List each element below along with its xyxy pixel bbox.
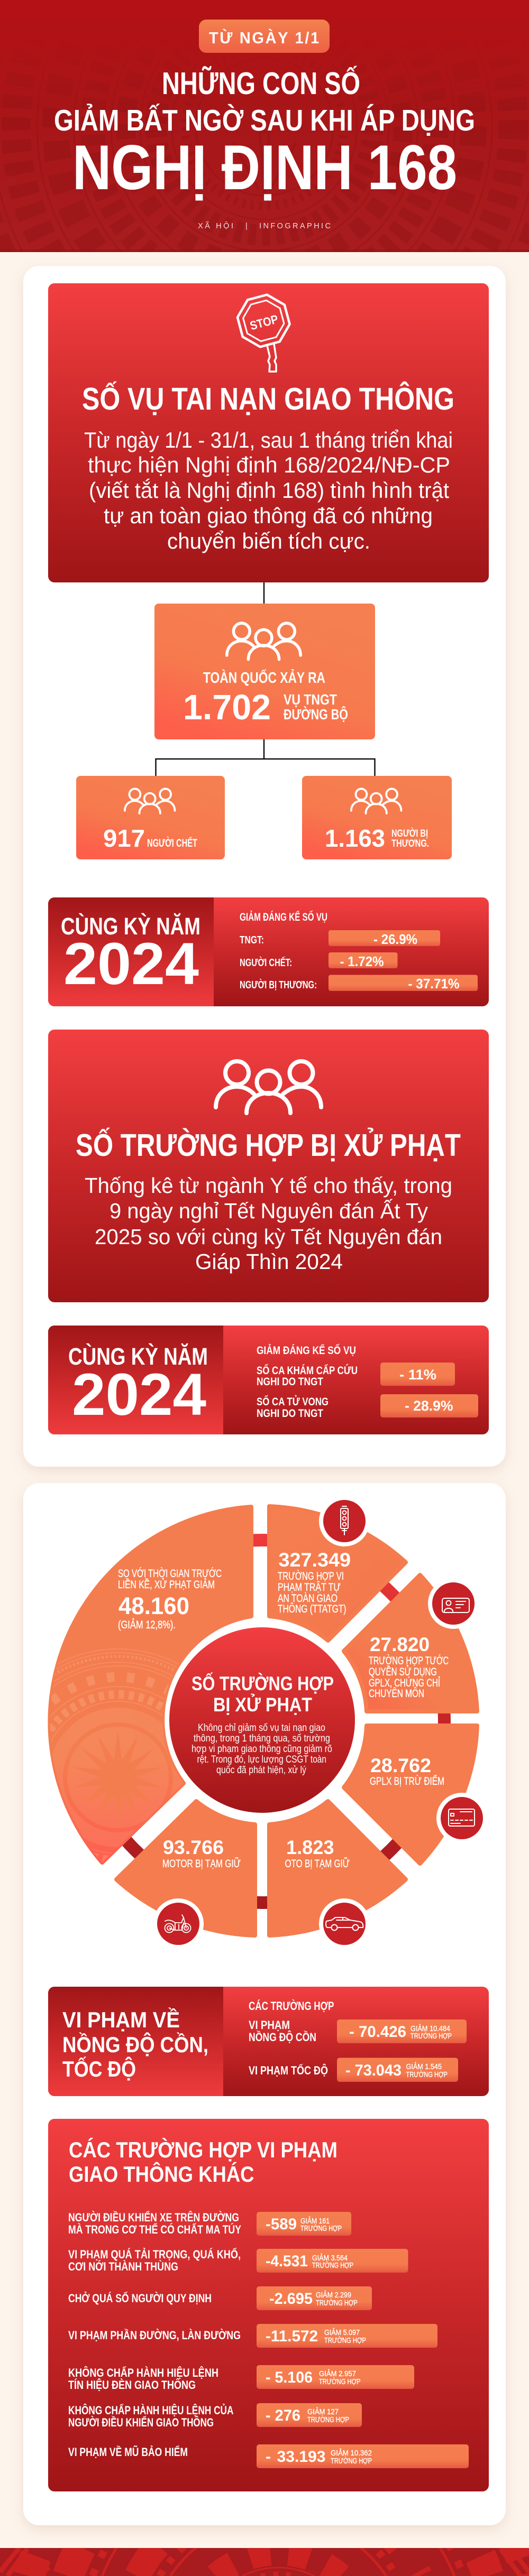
heading: SỐ VỤ TAI NẠN GIAO THÔNG — [82, 381, 454, 416]
total unit: VỤ TNGT — [284, 691, 337, 708]
row: traffic controller: KHÔNG CHẤP HÀNH HIỆU LỆNH CỦA — [68, 2404, 234, 2417]
icon: stop sign: STOP — [249, 312, 279, 332]
row: helmets: TRƯỜNG HỢP — [331, 2457, 372, 2466]
bar: deaths — [240, 952, 398, 969]
intro text — [85, 1173, 452, 1274]
segment: compared to previous period: (GIẢM 12,8%). — [118, 1619, 176, 1631]
row: drugs: MÀ TRONG CƠ THỂ CÓ CHẤT MA TÚY — [68, 2223, 241, 2236]
row: lane violations: VI PHẠM PHẦN ĐƯỜNG, LÀN ĐƯỜNG — [68, 2329, 241, 2342]
segment: licences revoked: QUYỀN SỬ DỤNG — [369, 1665, 437, 1678]
deaths number: 917 — [103, 824, 145, 852]
segment: licence points deducted: GPLX BỊ TRỪ ĐIỂM — [370, 1775, 444, 1787]
intro text: Từ ngày 1/1 - 31/1, sau 1 tháng triển khai — [84, 428, 453, 452]
segment: compared to previous period: LIỀN KỀ, XỬ PHẠT GIẢM — [118, 1578, 215, 1591]
row: traffic controller: - 276 — [266, 2407, 300, 2424]
bars label: GIẢM ĐÁNG KỂ SỐ VỤ — [240, 911, 327, 923]
box: nationwide total — [154, 604, 375, 739]
row: helmets — [68, 2444, 469, 2468]
row: helmets: GIẢM 10.362 — [331, 2449, 372, 2458]
panel heading: VI PHẠM VỀ — [62, 2007, 180, 2032]
icon: people — [227, 623, 300, 660]
bar: injured: - 37.71% — [408, 976, 459, 992]
date badge — [199, 20, 330, 53]
segment: cars impounded: OTO BỊ TẠM GIỮ — [285, 1857, 350, 1870]
section tag — [198, 221, 331, 230]
panel heading: NỒNG ĐỘ CỒN, — [62, 2032, 208, 2057]
icon: people — [216, 1061, 321, 1113]
bar: alcohol: NỒNG ĐỘ CỒN — [249, 2031, 316, 2044]
box: injured — [302, 776, 452, 859]
row: lane violations: -11.572 — [266, 2328, 318, 2345]
segment: licence points deducted — [344, 1726, 477, 1864]
row: traffic signals: TÍN HIỆU ĐÈN GIAO THÔNG — [68, 2378, 196, 2392]
bar: injured — [240, 975, 478, 992]
segment: compared to previous period: SO VỚI THỜI GIAN TRƯỚC — [118, 1568, 222, 1580]
icon: traffic light — [321, 1498, 368, 1544]
bar: alcohol: GIẢM 10.484 — [411, 2024, 450, 2033]
bar: TNGT: TNGT: — [240, 934, 264, 946]
row: overload: GIẢM 3.564 — [312, 2254, 348, 2263]
segment: traffic order violations: 327.349 — [278, 1549, 351, 1571]
bar: alcohol: TRƯỜNG HỢP — [411, 2032, 452, 2041]
main title — [54, 66, 475, 203]
panel heading: GIAO THÔNG KHÁC — [69, 2161, 254, 2186]
segment: motorbikes impounded: MOTOR BỊ TẠM GIỮ — [162, 1857, 241, 1870]
injured number: 1.163 — [325, 824, 385, 852]
bar: fatalities: - 28.9% — [405, 1398, 453, 1414]
segment: licences revoked: GPLX, CHỨNG CHỈ — [369, 1677, 440, 1689]
row: traffic controller: NGƯỜI ĐIỀU KHIỂN GIAO THÔNG — [68, 2416, 214, 2429]
bar: TNGT — [240, 930, 440, 947]
bars label: CÁC TRƯỜNG HỢP — [249, 1999, 334, 2013]
row: drugs: TRƯỜNG HỢP — [300, 2224, 342, 2233]
intro text: chuyển biến tích cực. — [167, 529, 370, 553]
bar: injured: NGƯỜI BỊ THƯƠNG: — [240, 978, 317, 991]
intro text: Giáp Thìn 2024 — [195, 1249, 343, 1274]
segment: motorbikes impounded — [116, 1801, 255, 1935]
bar: alcohol — [249, 2018, 467, 2044]
intro text: (viết tắt là Nghị định 168) tình hình trật — [89, 478, 449, 503]
row: lane violations: TRƯỜNG HỢP — [324, 2336, 366, 2345]
bar: speed: TRƯỜNG HỢP — [406, 2070, 448, 2079]
panel: accident intro — [48, 283, 489, 582]
centre circle: hợp vi phạm giao thông cũng giảm rõ — [191, 1743, 332, 1755]
icon: licence card — [430, 1580, 477, 1627]
icon: bank card — [439, 1795, 485, 1841]
row: helmets: VI PHẠM VỀ MŨ BẢO HIỂM — [68, 2445, 188, 2459]
date badge: TỪ NGÀY 1/1 — [209, 28, 321, 47]
total label: TOÀN QUỐC XẢY RA — [203, 669, 325, 687]
row: traffic signals: - 5.106 — [266, 2369, 313, 2386]
header banner — [0, 0, 529, 252]
segment: licences revoked — [344, 1575, 477, 1711]
year heading: 2024 — [72, 1361, 206, 1428]
row: too many passengers — [68, 2286, 372, 2310]
row: drugs: NGƯỜI ĐIỀU KHIỂN XE TRÊN ĐƯỜNG — [68, 2211, 239, 2224]
icon: car — [321, 1901, 368, 1947]
row: overload: VI PHẠM QUÁ TẢI TRỌNG, QUÁ KHỔ, — [68, 2248, 241, 2261]
row: traffic controller — [68, 2403, 362, 2429]
row: traffic signals — [68, 2365, 414, 2392]
panel: other violations — [48, 2119, 489, 2491]
row: too many passengers: CHỞ QUÁ SỐ NGƯỜI QUY ĐỊNH — [68, 2291, 212, 2305]
section tag: INFOGRAPHIC — [259, 222, 331, 230]
bar: emergency cases — [257, 1363, 455, 1388]
panel: comparison 2024 accidents — [48, 897, 489, 1006]
icon: motorbike — [155, 1901, 202, 1947]
bars label: GIẢM ĐÁNG KỂ SỐ VỤ — [257, 1344, 356, 1357]
row: helmets: - — [266, 2448, 271, 2466]
segment: traffic order violations: AN TOÀN GIAO — [278, 1592, 338, 1605]
panel heading: CÁC TRƯỜNG HỢP VI PHẠM — [69, 2137, 338, 2162]
row: drugs: -589 — [266, 2216, 297, 2233]
centre circle: thông, trong 1 tháng qua, số trường — [194, 1732, 330, 1744]
row: lane violations: GIẢM 5.097 — [324, 2328, 360, 2337]
intro text — [84, 428, 453, 553]
segment: motorbikes impounded: 93.766 — [163, 1837, 224, 1858]
row: overload: CƠI NỚI THÀNH THÙNG — [68, 2260, 178, 2273]
section tag: XÃ HỘI — [198, 221, 233, 230]
bar: emergency cases: SỐ CA KHÁM CẤP CỨU — [257, 1364, 358, 1377]
bar: speed: - 73.043 — [345, 2062, 402, 2079]
total unit: ĐƯỜNG BỘ — [284, 706, 348, 722]
bar: deaths: NGƯỜI CHẾT: — [240, 956, 292, 969]
row: lane violations — [68, 2324, 437, 2348]
white card: penalties — [0, 1483, 506, 2525]
segment: cars impounded: 1.823 — [286, 1837, 334, 1858]
bar: fatalities — [257, 1394, 478, 1420]
intro text: Thống kê từ ngành Y tế cho thấy, trong — [85, 1173, 452, 1198]
radial chart: penalty cases — [48, 1500, 483, 1945]
injured unit: THƯƠNG. — [391, 838, 429, 849]
panel: comparison 2024 holiday — [48, 1326, 489, 1434]
white card: accidents — [23, 266, 506, 1467]
bar: alcohol: VI PHẠM — [249, 2018, 290, 2032]
segment: licences revoked: 27.820 — [370, 1634, 430, 1655]
year heading: CÙNG KỲ NĂM — [68, 1343, 208, 1370]
intro text: 2025 so với cùng kỳ Tết Nguyên đán — [95, 1225, 442, 1249]
bar: alcohol: - 70.426 — [349, 2023, 406, 2041]
panel heading — [69, 2137, 338, 2186]
row: too many passengers: GIẢM 2.299 — [316, 2291, 351, 2300]
row: traffic signals: KHÔNG CHẤP HÀNH HIỆU LỆNH — [68, 2366, 218, 2379]
bar: speed: VI PHẠM TỐC ĐỘ — [249, 2063, 328, 2077]
box: deaths — [76, 776, 225, 859]
segment: licences revoked: TRƯỜNG HỢP TƯỚC — [369, 1655, 449, 1667]
total number: 1.702 — [183, 688, 271, 727]
centre circle: rệt. Trong đó, lực lượng CSGT toàn — [197, 1754, 326, 1765]
intro text: tự an toàn giao thông đã có những — [104, 503, 433, 528]
centre circle: quốc đã phát hiện, xử lý — [216, 1764, 306, 1776]
segment: traffic order violations: TRƯỜNG HỢP VI — [278, 1570, 344, 1582]
row: helmets: 33.193 — [277, 2448, 326, 2466]
footer banner — [0, 2548, 529, 2576]
centre circle — [169, 1627, 355, 1813]
segment: traffic order violations: THÔNG (TTATGT) — [278, 1603, 346, 1615]
panel heading — [62, 2007, 208, 2081]
row: traffic controller: GIẢM 127 — [307, 2407, 339, 2416]
intro text: 9 ngày nghỉ Tết Nguyên đán Ất Ty — [110, 1199, 428, 1223]
segment: compared to previous period — [48, 1505, 253, 1865]
row: traffic controller: TRƯỜNG HỢP — [307, 2415, 349, 2424]
row: too many passengers: -2.695 — [269, 2290, 313, 2308]
icon: people — [125, 789, 175, 813]
deaths unit: NGƯỜI CHẾT — [147, 837, 197, 849]
main title: NHỮNG CON SỐ — [162, 66, 360, 101]
panel heading: TỐC ĐỘ — [62, 2056, 136, 2081]
panel: penalty intro — [48, 1030, 489, 1302]
total unit — [284, 691, 348, 722]
year heading: 2024 — [63, 931, 199, 997]
bar: speed: GIẢM 1.545 — [406, 2062, 442, 2071]
panel: alcohol and speed — [48, 1987, 489, 2096]
row: drugs: GIẢM 161 — [300, 2217, 330, 2226]
injured unit — [391, 828, 429, 849]
injured unit: NGƯỜI BỊ — [391, 828, 428, 839]
row: drugs — [68, 2211, 351, 2236]
heading: SỐ TRƯỜNG HỢP BỊ XỬ PHẠT — [76, 1127, 461, 1163]
tree connectors — [156, 582, 375, 776]
year heading: CÙNG KỲ NĂM — [61, 913, 200, 940]
row: overload: TRƯỜNG HỢP — [312, 2261, 353, 2270]
row: too many passengers: TRƯỜNG HỢP — [316, 2299, 358, 2308]
bar: fatalities: NGHI DO TNGT — [257, 1407, 323, 1420]
bar: speed — [249, 2058, 458, 2082]
bar: emergency cases: - 11% — [399, 1367, 436, 1383]
row: traffic signals: GIẢM 2.957 — [319, 2369, 356, 2378]
bar: emergency cases: NGHI DO TNGT — [257, 1376, 323, 1388]
icon: people — [351, 789, 401, 813]
centre circle: Không chỉ giảm số vụ tai nạn giao — [198, 1722, 325, 1734]
centre circle: BỊ XỬ PHẠT — [213, 1693, 312, 1716]
row: overload — [68, 2248, 408, 2273]
segment: traffic order violations — [269, 1506, 406, 1641]
intro text: thực hiện Nghị định 168/2024/NĐ-CP — [88, 452, 450, 477]
row: traffic signals: TRƯỜNG HỢP — [319, 2377, 361, 2386]
segment: traffic order violations: PHẠM TRẬT TỰ — [278, 1581, 341, 1593]
bar: fatalities: SỐ CA TỬ VONG — [257, 1395, 329, 1408]
segment: cars impounded — [269, 1801, 406, 1935]
segment: licences revoked: CHUYÊN MÔN — [369, 1688, 424, 1700]
segment: compared to previous period: 48.160 — [118, 1592, 189, 1619]
bar: TNGT: - 26.9% — [373, 931, 417, 947]
centre circle: SỐ TRƯỜNG HỢP — [191, 1672, 334, 1694]
row: overload: -4.531 — [266, 2253, 308, 2270]
segment: licence points deducted: 28.762 — [370, 1755, 431, 1776]
bar: deaths: - 1.72% — [340, 953, 384, 969]
section tag: | — [245, 222, 248, 230]
main title: NGHỊ ĐỊNH 168 — [72, 132, 457, 203]
icon: stop sign — [234, 291, 294, 372]
